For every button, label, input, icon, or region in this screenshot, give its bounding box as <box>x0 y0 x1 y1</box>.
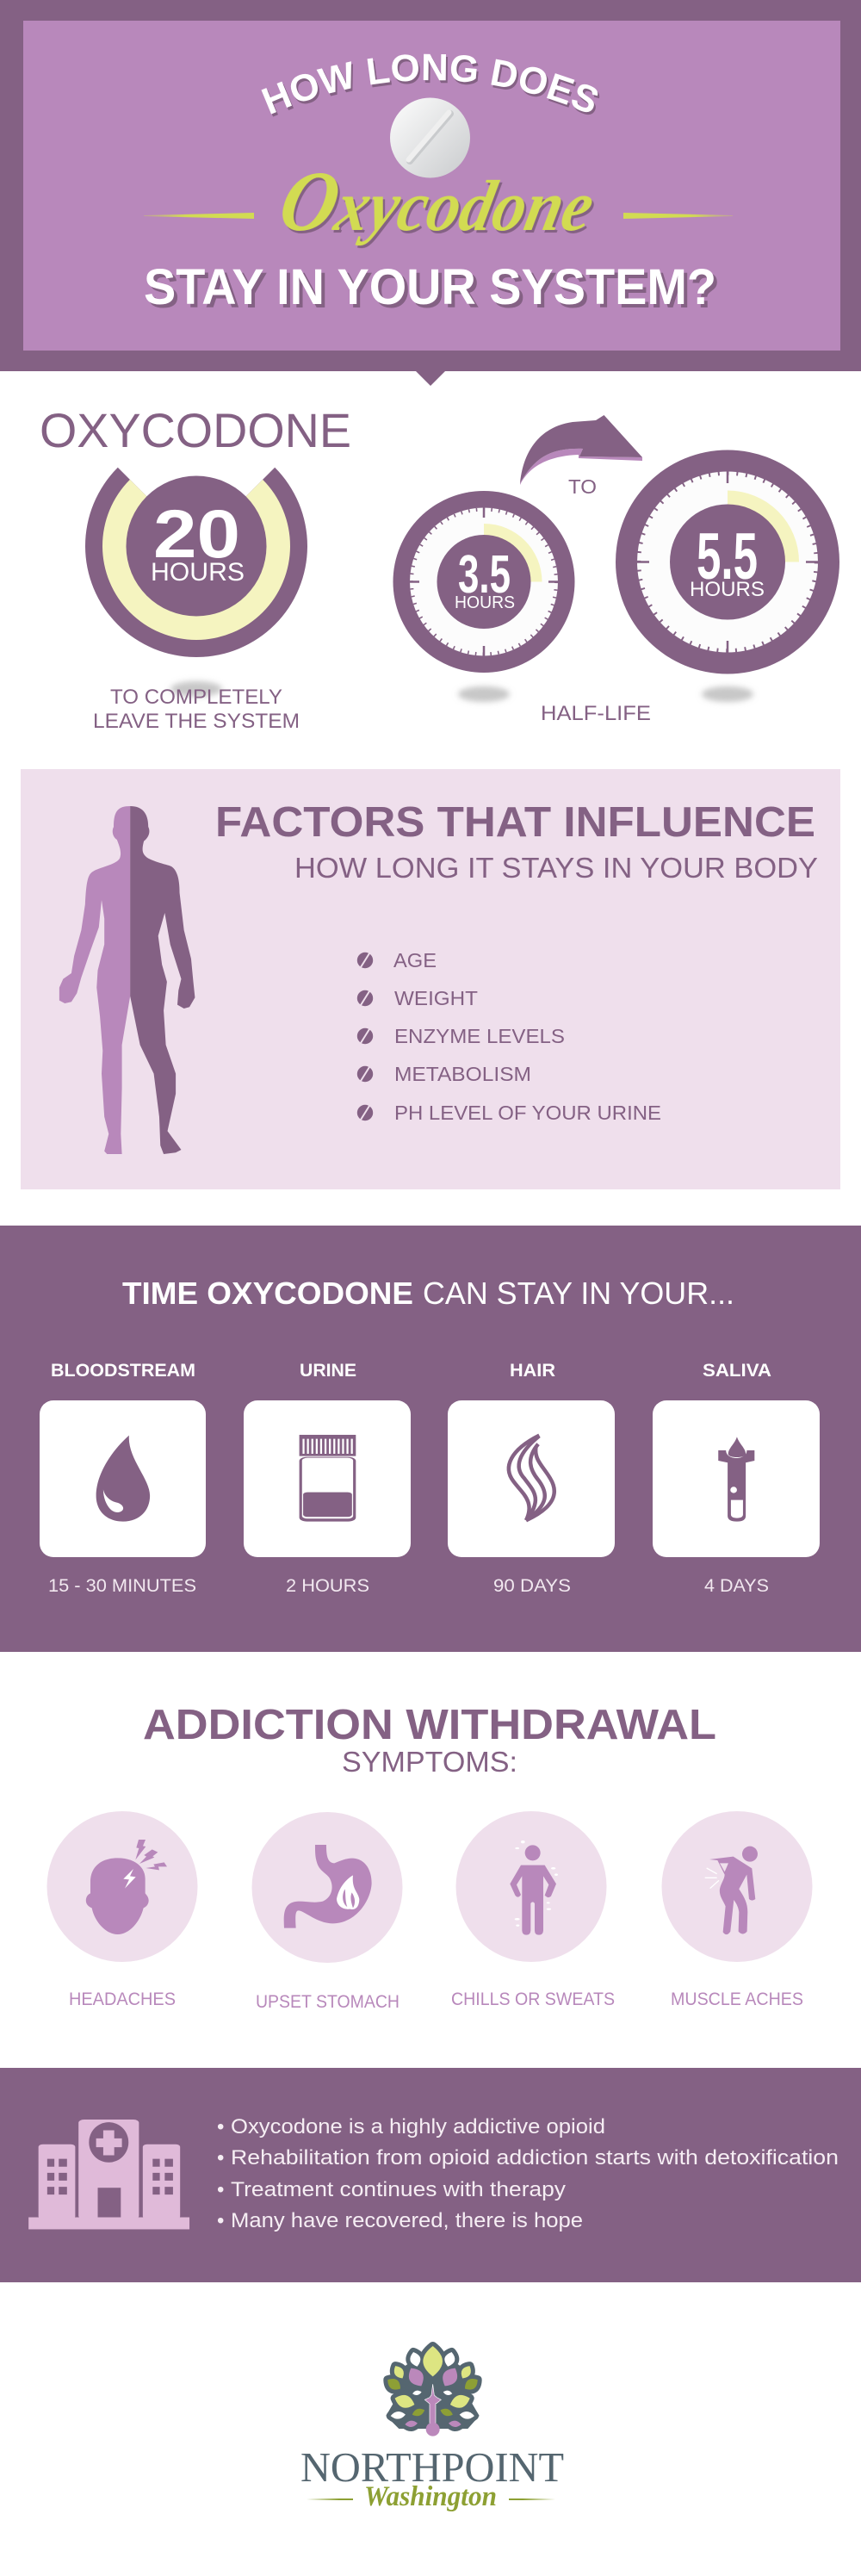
list: factors: METABOLISM <box>394 1063 531 1085</box>
list: factors: ENZYME LEVELS <box>394 1025 565 1047</box>
shadow: 3.5 dial <box>458 686 510 702</box>
list: key points: Many have recovered, there is hope <box>231 2209 583 2232</box>
heading: oxycodone: OXYCODONE <box>40 403 351 457</box>
cards: white tiles <box>40 1400 820 1557</box>
shadow: 20 hours dial <box>170 681 222 697</box>
icon: peacock emblem <box>385 2346 480 2436</box>
heading: time oxycodone can stay: CAN STAY IN YOUR... <box>423 1276 734 1311</box>
rule: left of washington <box>307 2498 353 2500</box>
icon: stomach <box>284 1845 372 1928</box>
icon: urine jar <box>300 1435 356 1522</box>
panel: time in body <box>0 1226 861 1652</box>
heading: addiction withdrawal: ADDICTION WITHDRAWAL <box>143 1702 716 1748</box>
labels: body locations: URINE <box>300 1360 356 1381</box>
icon: body silhouette <box>59 806 195 1154</box>
list: factors: WEIGHT <box>394 987 478 1009</box>
list: key points: • <box>217 2115 224 2138</box>
list: factors: AGE <box>393 949 437 971</box>
list: key points: • <box>217 2146 224 2169</box>
labels: body locations: BLOODSTREAM <box>51 1360 195 1381</box>
chart: 5.5 hours dial: 5.5 <box>697 520 758 593</box>
wordmark: northpoint: NORTHPOINT <box>300 2443 564 2491</box>
arrow: half-life <box>520 415 642 485</box>
chart: 3.5 hours dial <box>393 491 575 673</box>
caption: to completely leave the system <box>93 686 300 733</box>
labels: symptoms: UPSET STOMACH <box>256 1991 400 2012</box>
labels: body locations: SALIVA <box>703 1360 771 1381</box>
title: stay in your system: STAY IN YOUR SYSTEM? <box>144 259 716 315</box>
caption: to completely leave the system: TO COMPLETELY <box>110 686 282 709</box>
shadow: 5.5 dial <box>702 686 753 702</box>
rule: right of washington <box>509 2498 555 2500</box>
wordmark: washington: Washington <box>364 2481 497 2512</box>
logo: northpoint washington <box>300 2346 564 2512</box>
values: durations <box>48 1575 769 1596</box>
labels: symptoms: HEADACHES <box>69 1989 176 2009</box>
rule: right of script <box>623 213 733 219</box>
labels: symptoms: MUSCLE ACHES <box>671 1989 803 2009</box>
symptom circles <box>46 1811 813 1963</box>
icon: saliva tube <box>718 1437 754 1522</box>
chart: 3.5 hours dial: HOURS <box>455 593 515 612</box>
icon: chills <box>510 1840 558 1935</box>
values: durations: 4 DAYS <box>704 1575 769 1596</box>
chart: 5.5 hours dial: HOURS <box>690 578 765 601</box>
list: factors <box>357 949 661 1124</box>
subheading: symptoms: SYMPTOMS: <box>342 1746 517 1778</box>
list: factors: PH LEVEL OF YOUR URINE <box>394 1102 661 1124</box>
icon: headache <box>86 1840 167 1934</box>
list: key points: Rehabilitation from opioid addiction starts with detoxification <box>231 2146 839 2169</box>
icon: muscle aches <box>705 1847 758 1934</box>
labels: symptoms: CHILLS OR SWEATS <box>451 1989 615 2009</box>
label: to: TO <box>568 475 597 498</box>
labels: symptoms <box>69 1989 803 2012</box>
chart: 3.5 hours dial: 3.5 <box>458 545 511 605</box>
labels: body locations <box>51 1360 771 1381</box>
values: durations: 90 DAYS <box>493 1575 571 1596</box>
heading: time oxycodone can stay <box>122 1276 734 1311</box>
chart: 20 hours dial: 20 <box>153 495 240 572</box>
list: key points: • <box>217 2178 224 2201</box>
list: key points: • <box>217 2209 224 2232</box>
chart: 5.5 hours dial <box>616 450 839 673</box>
icon: pill <box>390 98 470 177</box>
chart: 20 hours dial <box>85 468 307 657</box>
caption: to completely leave the system: LEAVE THE SYSTEM <box>93 710 300 733</box>
panel: factors <box>21 769 840 1189</box>
panel: header <box>0 0 861 386</box>
icon: blood drop <box>96 1436 150 1522</box>
icon: hair <box>509 1436 554 1520</box>
icon: hospital <box>28 2120 189 2229</box>
list: key points: Treatment continues with therapy <box>231 2178 566 2201</box>
heading: time oxycodone can stay: TIME OXYCODONE <box>122 1276 413 1311</box>
title: how long does: HOW LONG DOES <box>262 53 599 117</box>
heading: factors that influence: FACTORS THAT INFLUENCE <box>215 799 815 846</box>
subheading: HOW LONG IT STAYS IN YOUR BODY <box>294 852 818 884</box>
values: durations: 15 - 30 MINUTES <box>48 1575 196 1596</box>
list: key points <box>217 2115 839 2232</box>
values: durations: 2 HOURS <box>286 1575 369 1596</box>
labels: body locations: HAIR <box>510 1360 555 1381</box>
chart: 20 hours dial: HOURS <box>151 558 245 587</box>
title: oxycodone script: Oxycodone <box>272 153 604 249</box>
caption: half-life: HALF-LIFE <box>541 702 651 725</box>
panel: key points <box>0 2068 861 2282</box>
list: key points: Oxycodone is a highly addictive opioid <box>231 2115 605 2138</box>
rule: left of script <box>144 213 254 219</box>
